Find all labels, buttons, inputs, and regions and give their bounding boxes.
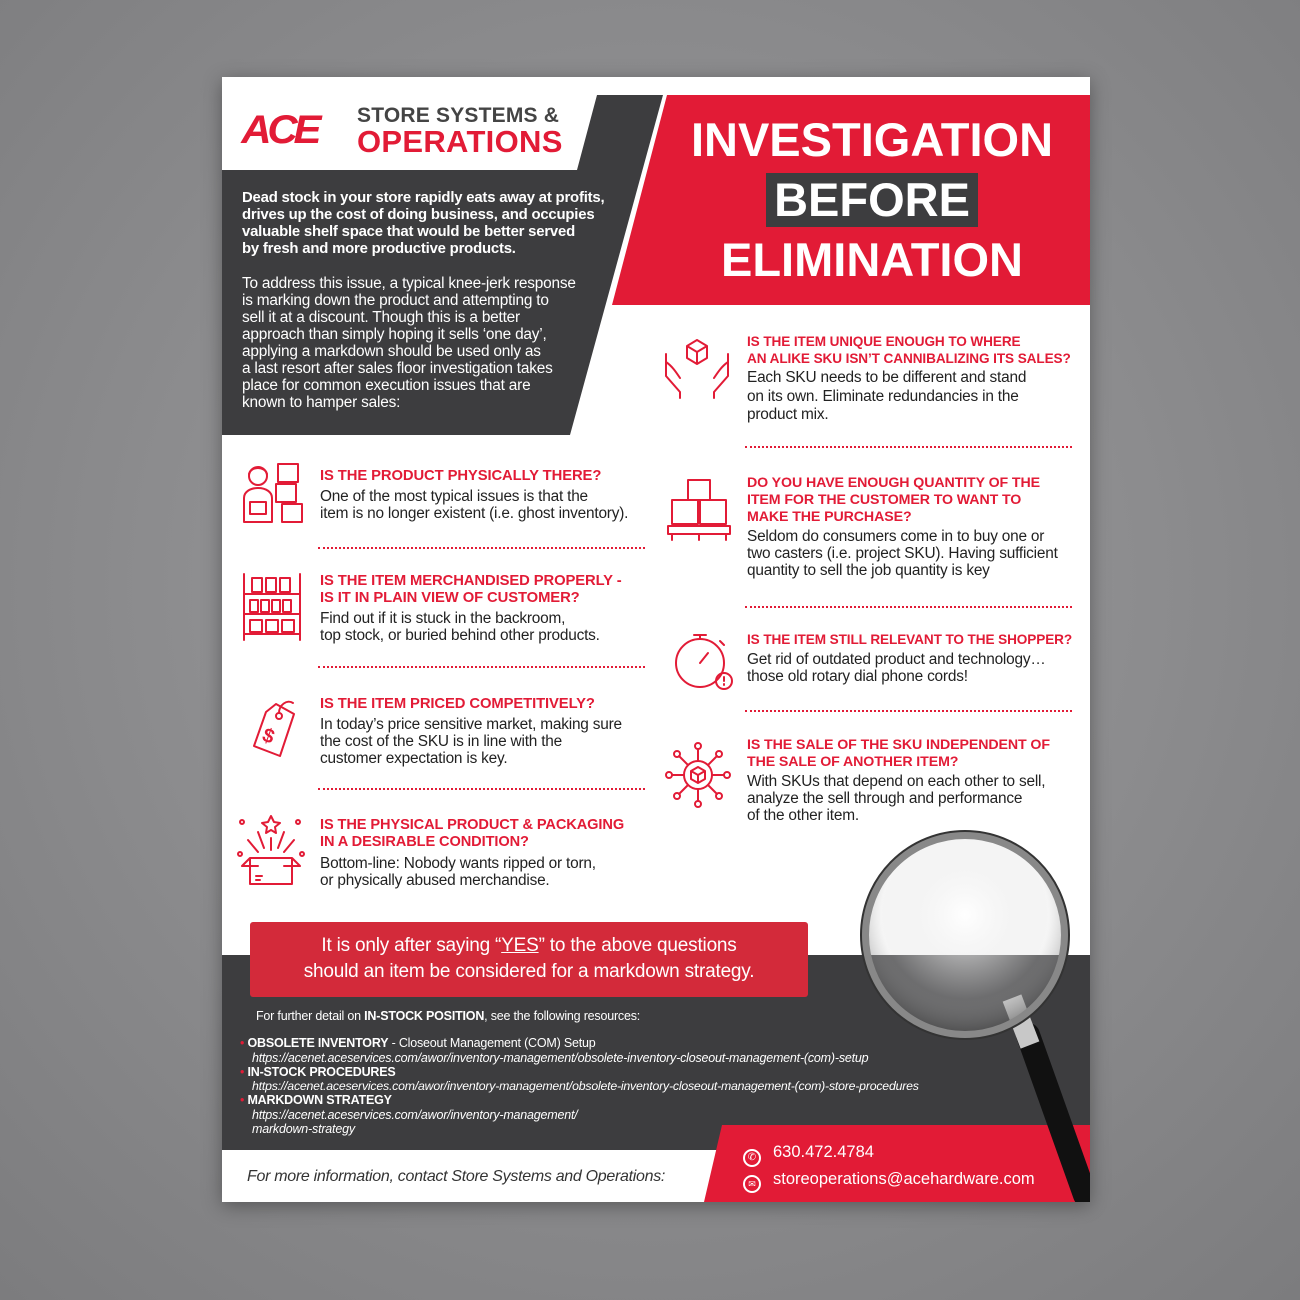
- contact details: ✆: [748, 1152, 756, 1163]
- contact details: ✉: [748, 1179, 756, 1189]
- item: merchandised properly: IS THE ITEM MERCHANDISED PROPERLY -: [320, 573, 622, 589]
- item: priced competitively: [253, 696, 622, 767]
- item: unique enough: IS THE ITEM UNIQUE ENOUGH TO WHERE: [747, 334, 1021, 349]
- icon: shelving: [243, 573, 301, 641]
- heading: store systems & operations: STORE SYSTEMS &: [357, 104, 559, 127]
- logo: ACE: ACE: [241, 108, 317, 152]
- item: independent sale: With SKUs that depend on each other to sell,: [747, 773, 1045, 790]
- icon: open box with sparkles: [237, 815, 305, 885]
- icon: hands with box: [664, 339, 729, 399]
- item: merchandised properly: [243, 573, 622, 644]
- red contact block: [704, 1125, 1090, 1202]
- title: BEFORE: [774, 173, 970, 226]
- heading: store systems & operations: [357, 104, 563, 159]
- item: enough quantity: DO YOU HAVE ENOUGH QUANTITY OF THE: [747, 475, 1040, 491]
- item: enough quantity: Seldom do consumers come in to buy one or: [747, 528, 1044, 545]
- resources text: For further detail on IN-STOCK POSITION, see the following resources:: [256, 1009, 640, 1023]
- item: priced competitively: the cost of the SKU is in line with the: [320, 733, 562, 750]
- item: packaging condition: or physically abused merchandise.: [320, 872, 550, 889]
- red title block: [612, 95, 1090, 305]
- item: unique enough: [664, 334, 1071, 423]
- item: physically there: IS THE PRODUCT PHYSICALLY THERE?: [320, 468, 601, 484]
- intro text: valuable shelf space that would be better served: [242, 224, 575, 240]
- title: [691, 113, 1053, 286]
- intro text: place for common execution issues that are: [242, 377, 530, 394]
- item: merchandised properly: IS IT IN PLAIN VIEW OF CUSTOMER?: [320, 590, 580, 606]
- item: packaging condition: IS THE PHYSICAL PRODUCT & PACKAGING: [320, 817, 624, 833]
- footer contact prompt: For more information, contact Store Systems and Operations:: [247, 1168, 665, 1185]
- item: still relevant: Get rid of outdated product and technology…: [747, 651, 1046, 668]
- resources text: https://acenet.aceservices.com/awor/inventory-management/obsolete-inventory-closeout-management-(com)-setup: [252, 1051, 868, 1065]
- icon: stacked boxes on pallet: [667, 479, 731, 541]
- icon: worker with boxes: [243, 463, 303, 523]
- item: packaging condition: IN A DESIRABLE CONDITION?: [320, 834, 529, 850]
- icon: price tag: [253, 700, 295, 757]
- intro text: drives up the cost of doing business, and occupies: [242, 207, 594, 223]
- item: packaging condition: Bottom-line: Nobody wants ripped or torn,: [320, 855, 596, 872]
- resources text: • OBSOLETE INVENTORY - Closeout Management (COM) Setup: [240, 1036, 596, 1050]
- item: independent sale: THE SALE OF ANOTHER ITEM?: [747, 754, 958, 770]
- item: priced competitively: In today’s price sensitive market, making sure: [320, 716, 622, 733]
- magnifying glass: [860, 830, 1090, 1202]
- item: enough quantity: two casters (i.e. project SKU). Having sufficient: [747, 545, 1058, 562]
- item: unique enough: Each SKU needs to be different and stand: [747, 369, 1026, 386]
- item: merchandised properly: top stock, or buried behind other products.: [320, 627, 600, 644]
- item: enough quantity: ITEM FOR THE CUSTOMER TO WANT TO: [747, 492, 1021, 508]
- title: ELIMINATION: [721, 233, 1023, 286]
- intro text: [242, 190, 604, 411]
- callout: YES statement: It is only after saying “YES” to the above questions: [321, 935, 737, 956]
- resources text: [240, 1009, 919, 1136]
- callout: YES statement: should an item be considered for a markdown strategy.: [304, 961, 754, 982]
- contact details: 630.472.4784: [773, 1143, 874, 1161]
- item: priced competitively: customer expectation is key.: [320, 750, 507, 767]
- intro text: by fresh and more productive products.: [242, 241, 516, 257]
- dark intro panel shape: [222, 95, 663, 435]
- item: still relevant: those old rotary dial phone cords!: [747, 668, 968, 685]
- intro text: sell it at a discount. Though this is a better: [242, 309, 520, 326]
- icon: network box: [665, 742, 731, 808]
- item: enough quantity: quantity to sell the job quantity is key: [747, 562, 990, 579]
- resources text: https://acenet.aceservices.com/awor/inventory-management/obsolete-inventory-closeout-management-(com)-store-procedures: [252, 1079, 919, 1093]
- intro text: a last resort after sales floor investigation takes: [242, 360, 553, 377]
- resources text: https://acenet.aceservices.com/awor/inventory-management/: [252, 1108, 578, 1122]
- page: [222, 77, 1090, 1202]
- item: unique enough: AN ALIKE SKU ISN’T CANNIBALIZING ITS SALES?: [747, 351, 1071, 366]
- item: enough quantity: MAKE THE PURCHASE?: [747, 509, 912, 525]
- icon: stopwatch: [675, 634, 733, 690]
- resources text: • MARKDOWN STRATEGY: [240, 1093, 392, 1107]
- item: enough quantity: [667, 475, 1058, 579]
- intro text: is marking down the product and attempting to: [242, 292, 549, 309]
- item: physically there: One of the most typical issues is that the: [320, 488, 588, 505]
- heading: store systems & operations: OPERATIONS: [357, 124, 563, 159]
- item: still relevant: IS THE ITEM STILL RELEVANT TO THE SHOPPER?: [747, 632, 1072, 647]
- item: priced competitively: IS THE ITEM PRICED COMPETITIVELY?: [320, 696, 595, 712]
- item: independent sale: IS THE SALE OF THE SKU INDEPENDENT OF: [747, 737, 1050, 753]
- item: packaging condition: [237, 815, 624, 889]
- intro text: Dead stock in your store rapidly eats away at profits,: [242, 190, 604, 206]
- item: merchandised properly: Find out if it is stuck in the backroom,: [320, 610, 565, 627]
- item: unique enough: product mix.: [747, 406, 828, 423]
- item: still relevant: [675, 632, 1072, 690]
- resources text: • IN-STOCK PROCEDURES: [240, 1065, 396, 1079]
- item: physically there: item is no longer existent (i.e. ghost inventory).: [320, 505, 628, 522]
- contact details: storeoperations@acehardware.com: [773, 1170, 1035, 1188]
- item: unique enough: on its own. Eliminate redundancies in the: [747, 388, 1019, 404]
- callout: YES statement: [250, 922, 808, 997]
- title: INVESTIGATION: [691, 113, 1053, 166]
- bottom dark band: [222, 955, 1090, 1150]
- item: independent sale: analyze the sell through and performance: [747, 790, 1022, 807]
- icon: price tag: $: [259, 724, 277, 749]
- intro text: To address this issue, a typical knee-jerk response: [242, 275, 576, 292]
- item: independent sale: [665, 737, 1050, 824]
- intro text: known to hamper sales:: [242, 394, 400, 411]
- intro text: applying a markdown should be used only as: [242, 343, 541, 360]
- item: independent sale: of the other item.: [747, 807, 859, 824]
- contact details: [743, 1143, 1035, 1193]
- resources text: markdown-strategy: [252, 1122, 355, 1136]
- item: physically there: [243, 463, 628, 523]
- intro text: approach than simply hoping it sells ‘one day’,: [242, 326, 547, 343]
